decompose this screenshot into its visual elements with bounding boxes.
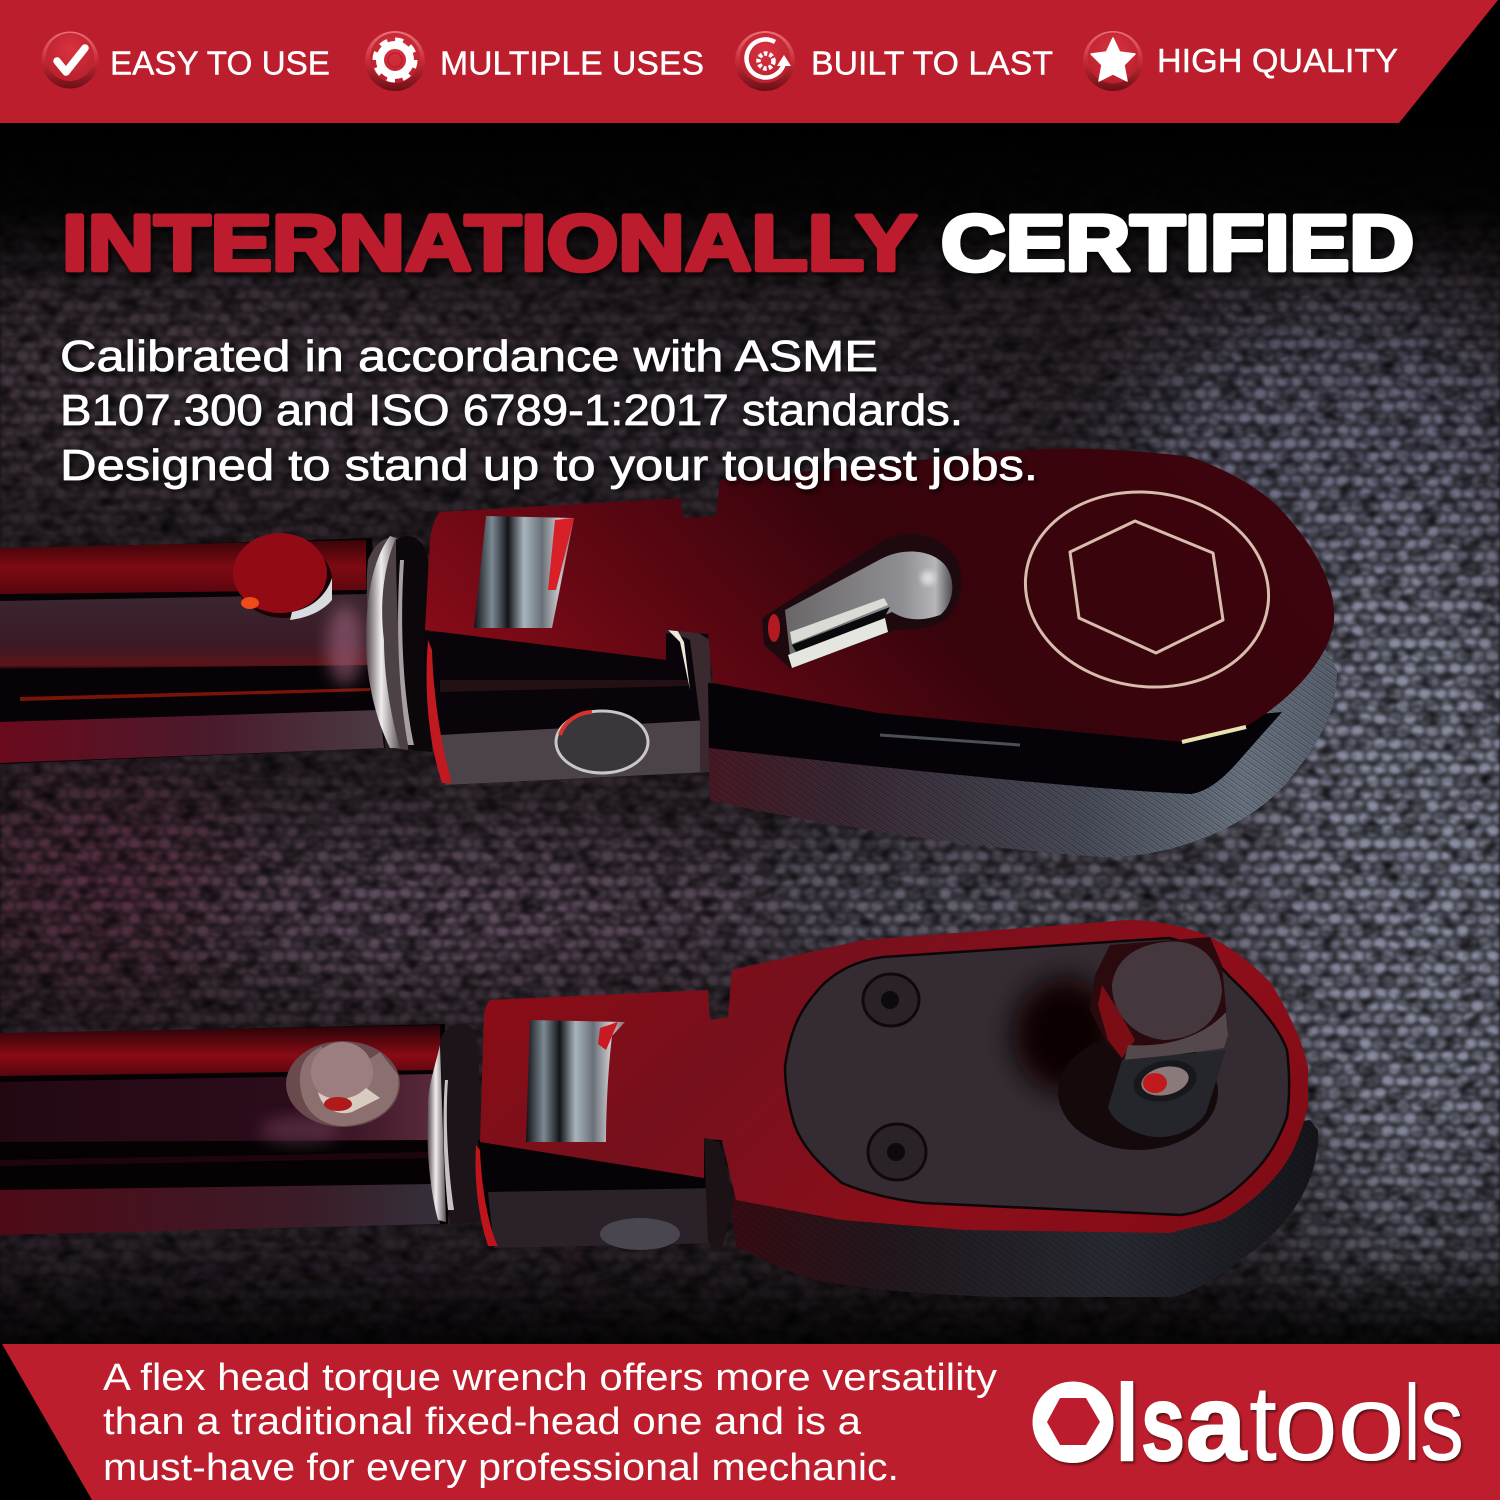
icon: star xyxy=(1083,31,1143,91)
icon: check mark xyxy=(42,32,98,88)
body text: Calibrated in accordance with ASME xyxy=(60,332,878,381)
title: CERTIFIED xyxy=(941,198,1414,287)
top banner xyxy=(0,0,1498,123)
body text: B107.300 and ISO 6789-1:2017 standards. xyxy=(60,386,963,435)
logo: Olsatools xyxy=(1032,1361,1464,1486)
footer text: must-have for every professional mechanic. xyxy=(103,1447,899,1489)
keyhole release slider xyxy=(762,534,961,668)
bottom wrench xyxy=(0,920,1318,1297)
wrench handle xyxy=(0,1024,448,1235)
head plate xyxy=(480,920,1308,1233)
label: easy to use: EASY TO USE xyxy=(110,44,330,82)
lower knuckle xyxy=(476,1138,734,1250)
round push button xyxy=(233,533,332,620)
logo: Olsatools: l xyxy=(1404,1362,1420,1483)
slot opening xyxy=(526,1020,625,1142)
Phillips screw on handle xyxy=(286,1041,400,1127)
underside of head xyxy=(708,640,1337,857)
collar and rubber o-ring xyxy=(366,536,432,752)
square drive xyxy=(1013,937,1228,1150)
logo: Olsatools: s xyxy=(1141,1362,1185,1483)
label: multiple uses: MULTIPLE USES xyxy=(440,44,704,82)
logo: Olsatools: o xyxy=(1337,1362,1405,1483)
chrome edge highlight xyxy=(1182,727,1246,742)
icon: gear xyxy=(365,31,425,91)
title: INTERNATIONALLY xyxy=(62,198,917,287)
body text xyxy=(60,332,1038,490)
footer text: A flex head torque wrench offers more versatility xyxy=(103,1357,997,1399)
engraved hex logo circle xyxy=(1013,476,1281,703)
logo: Olsatools: l xyxy=(1116,1362,1138,1483)
matte inner plate xyxy=(785,938,1289,1215)
lower knuckle xyxy=(424,628,712,785)
footer text: than a traditional fixed-head one and is a xyxy=(103,1401,862,1443)
photo background: woven dark fabric xyxy=(0,214,1500,1344)
body text: Designed to stand up to your toughest jobs. xyxy=(60,441,1038,490)
label: built to last: BUILT TO LAST xyxy=(811,44,1053,82)
logo: Olsatools: s xyxy=(1420,1362,1464,1483)
logo: Olsatools: t xyxy=(1249,1362,1277,1483)
title xyxy=(62,198,1414,287)
bottom banner xyxy=(2,1344,1500,1500)
collar and rubber o-ring xyxy=(427,1024,481,1224)
slot opening xyxy=(474,516,574,628)
wrench handle xyxy=(0,538,385,764)
footer text xyxy=(103,1357,997,1489)
plate screws xyxy=(863,974,926,1180)
label: high quality: HIGH QUALITY xyxy=(1157,42,1398,79)
underside of head xyxy=(730,1120,1318,1297)
top wrench xyxy=(0,449,1337,857)
logo: Olsatools: O xyxy=(1033,1361,1113,1486)
knuckle pin xyxy=(556,711,648,773)
chrome head plate xyxy=(425,449,1334,742)
icon: gear with circular arrow xyxy=(735,31,795,91)
logo: Olsatools: o xyxy=(1274,1362,1338,1483)
logo: Olsatools: a xyxy=(1186,1362,1247,1483)
